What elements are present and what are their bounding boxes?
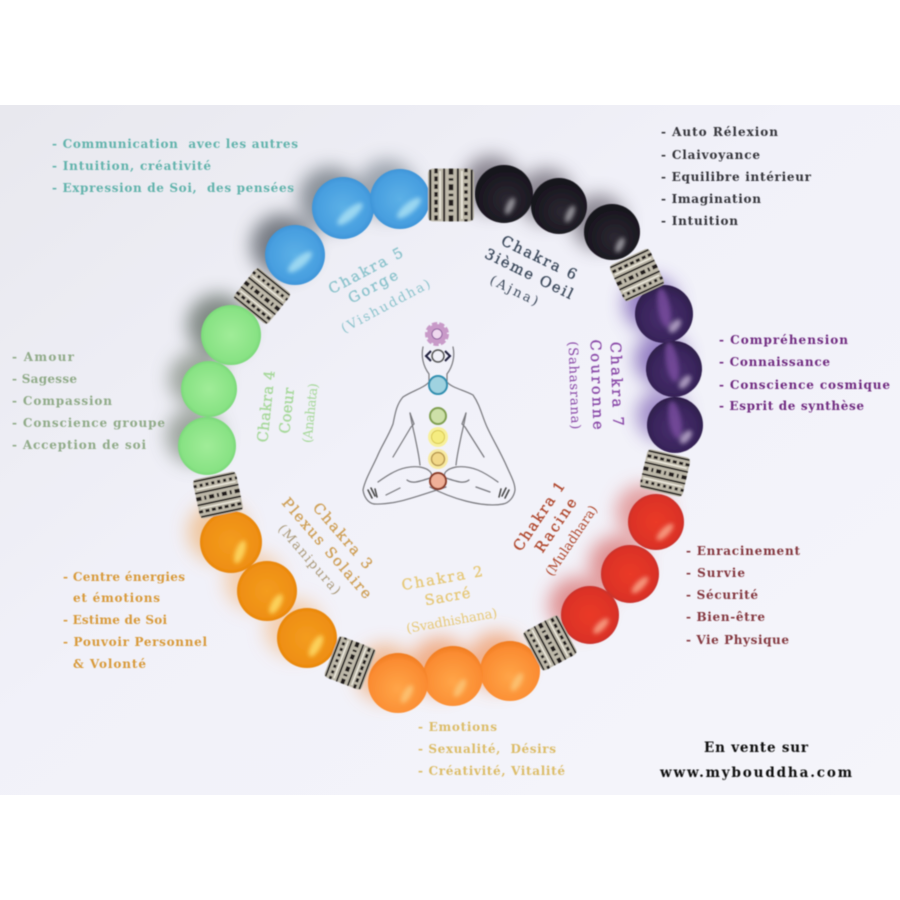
list: chakra 2: - Sexualité, Désirs	[418, 742, 556, 756]
sales note: En vente sur	[704, 740, 809, 756]
bracelet	[178, 165, 703, 713]
sacral chakra	[428, 449, 448, 469]
label: chakra 4: Chakra 4	[255, 370, 279, 443]
root chakra	[430, 473, 446, 489]
list: chakra 1: - Bien-être	[686, 610, 765, 624]
silver spacers	[192, 169, 691, 691]
label: chakra 5: (Vishuddha)	[339, 277, 433, 337]
list: chakra 6	[661, 125, 812, 228]
list: chakra 2: - Emotions	[418, 720, 497, 734]
label: chakra 1: Racine	[533, 496, 581, 556]
beads: chakra 2 orange	[368, 641, 540, 713]
list: chakra 4: - Acception de soi	[12, 438, 146, 452]
list: chakra 3	[63, 570, 207, 671]
list: chakra 6: - Equilibre intérieur	[661, 170, 812, 184]
beads: chakra 6 black	[475, 165, 640, 260]
meditating figure with chakras	[363, 324, 515, 505]
label: chakra 7	[564, 339, 626, 431]
label: chakra 3	[263, 482, 389, 615]
ring labels	[255, 229, 626, 637]
label: chakra 2	[398, 563, 498, 637]
heart chakra	[430, 408, 446, 424]
list: chakra 7: - Compréhension	[719, 333, 848, 347]
label: chakra 6: (Ajna)	[487, 273, 540, 309]
third eye chakra	[426, 350, 450, 362]
list: chakra 3: - Centre énergies	[63, 570, 185, 584]
list: chakra 7: - Conscience cosmique	[719, 378, 890, 392]
label: chakra 1: (Muladhara)	[543, 503, 601, 579]
list: chakra 6: - Auto Rélexion	[661, 125, 778, 139]
crown chakra	[427, 324, 447, 344]
photo background panel	[0, 105, 900, 795]
list: chakra 2	[418, 720, 565, 778]
list: chakra 1: - Enracinement	[686, 544, 800, 558]
label: chakra 7: (Sahasrana)	[564, 341, 583, 430]
label: chakra 3: (Manipura)	[274, 522, 343, 598]
label: chakra 2: (Svadhishana)	[405, 606, 498, 637]
list: chakra 1: - Sécurité	[686, 588, 758, 602]
list: chakra 6: - Imagination	[661, 192, 761, 206]
label: chakra 1	[509, 479, 602, 579]
label: chakra 5: Chakra 5	[326, 245, 406, 298]
throat chakra	[429, 376, 447, 394]
label: chakra 7: Couronne	[586, 339, 606, 430]
list: chakra 4: - Compassion	[12, 394, 112, 408]
label: chakra 6: Chakra 6	[498, 233, 579, 284]
list: chakra 4: - Amour	[12, 350, 75, 364]
list: chakra 6: - Intuition	[661, 214, 738, 228]
label: chakra 6: 3ième Oeil	[482, 246, 576, 303]
label: chakra 6	[473, 229, 584, 322]
list: chakra 3: et émotions	[73, 591, 160, 605]
list: chakra 1: - Vie Physique	[686, 633, 789, 647]
list: chakra 4: - Sagesse	[12, 372, 77, 386]
label: chakra 3: Chakra 3	[309, 500, 375, 573]
list: chakra 1: - Survie	[686, 566, 745, 580]
list: chakra 5: - Intuition, créativité	[52, 159, 211, 173]
body outline	[363, 347, 515, 505]
label: chakra 5	[320, 241, 433, 337]
beads: chakra 3 amber	[200, 511, 337, 668]
list: chakra 4: - Conscience groupe	[12, 416, 165, 430]
list: chakra 5: - Expression de Soi, des pensées	[52, 181, 294, 195]
list: chakra 1	[686, 544, 800, 647]
label: chakra 4: (Anahata)	[300, 383, 322, 444]
bracelet ring shadow	[166, 156, 687, 702]
list: chakra 7: - Esprit de synthèse	[719, 399, 864, 413]
list: chakra 7: - Connaissance	[719, 355, 830, 369]
sales note: www.mybouddha.com	[659, 765, 852, 781]
list: chakra 5	[52, 137, 298, 195]
list: chakra 6: - Claivoyance	[661, 148, 760, 162]
label: chakra 4	[255, 370, 323, 448]
sales note	[659, 740, 852, 781]
label: chakra 2: Sacré	[424, 586, 472, 609]
list: chakra 3: & Volonté	[73, 657, 146, 671]
beads: chakra 4 green	[178, 305, 261, 475]
beads: chakra 1 red	[561, 494, 684, 644]
list: chakra 5: - Communication avec les autres	[52, 137, 298, 151]
list: chakra 3: - Pouvoir Personnel	[63, 635, 207, 649]
list: chakra 7	[719, 333, 890, 413]
list: chakra 2: - Créativité, Vitalité	[418, 764, 565, 778]
label: chakra 1: Chakra 1	[511, 479, 569, 554]
label: chakra 3: Plexus Solaire	[278, 495, 374, 602]
list: chakra 4	[12, 350, 165, 452]
label: chakra 7: Chakra 7	[607, 342, 625, 426]
list: chakra 3: - Estime de Soi	[63, 613, 167, 627]
label: chakra 2: Chakra 2	[401, 564, 484, 594]
label: chakra 5: Gorge	[346, 268, 401, 307]
label: chakra 4: Coeur	[277, 387, 298, 434]
description lists	[12, 125, 890, 781]
solar plexus chakra	[428, 427, 448, 447]
beads: chakra 7 purple	[635, 285, 703, 453]
beads: chakra 5 blue	[265, 169, 430, 285]
